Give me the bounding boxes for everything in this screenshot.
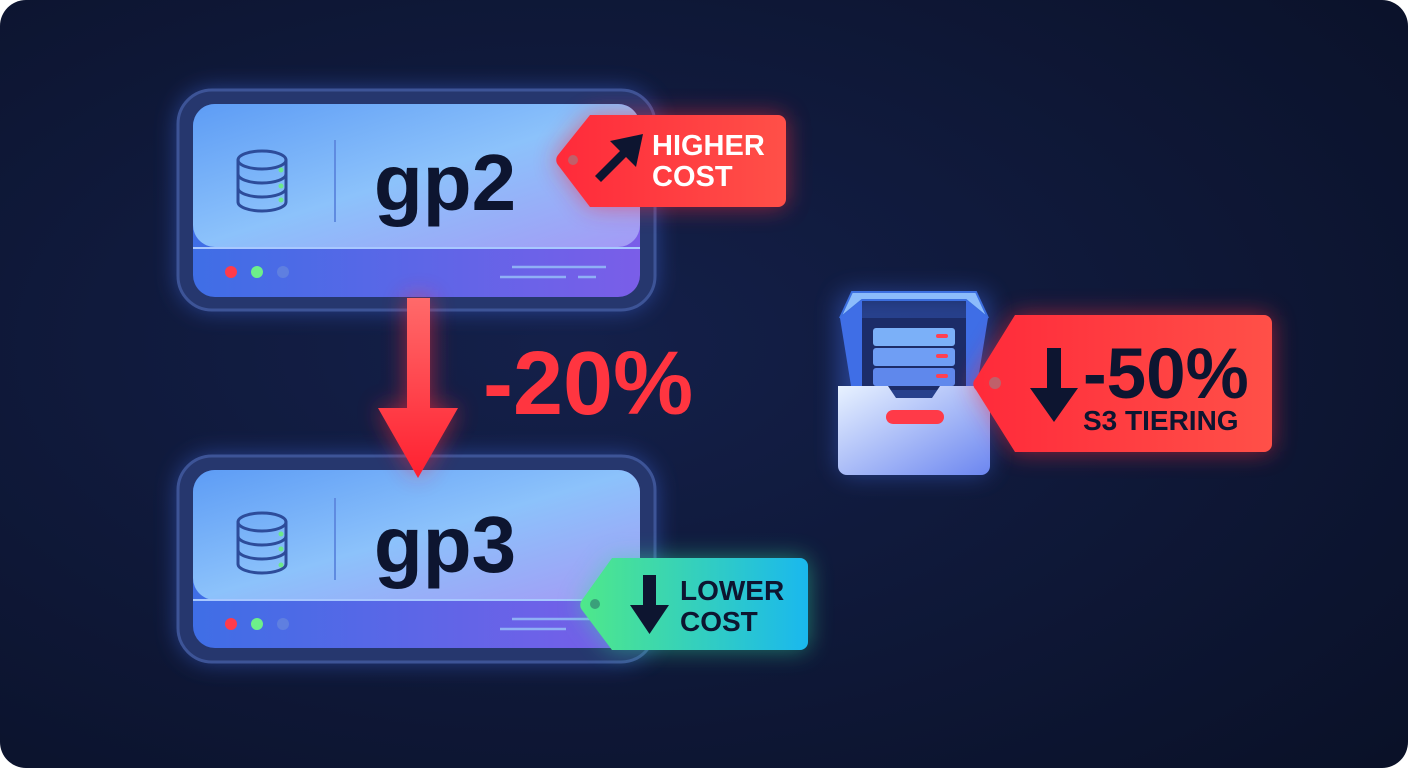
- icon: arrow down: [1030, 348, 1078, 422]
- icon: arrow up-right: [595, 134, 643, 182]
- icon: database: [238, 151, 286, 211]
- tag: higher cost: [556, 115, 786, 207]
- tag: lower cost: [580, 558, 808, 650]
- tag: lower cost: COST: [680, 606, 758, 637]
- label: -20%: -20%: [483, 334, 693, 434]
- tag: -50% S3 tiering: [973, 315, 1272, 452]
- tag: higher cost: HIGHER: [652, 130, 765, 162]
- tag: lower cost: LOWER: [680, 575, 784, 606]
- heading: gp2: gp2: [374, 138, 516, 227]
- icon: database: [238, 513, 286, 573]
- tag: -50% S3 tiering: S3 TIERING: [1083, 405, 1239, 436]
- panel: gp2: [178, 90, 655, 310]
- heading: gp3: gp3: [374, 500, 516, 589]
- panel: gp3: [178, 456, 655, 662]
- icon: arrow down: [630, 575, 669, 634]
- tag: higher cost: COST: [652, 161, 733, 193]
- tag: -50% S3 tiering: -50%: [1083, 335, 1249, 414]
- arrow: gp2 to gp3: [378, 298, 458, 478]
- icon: archive box: [838, 292, 990, 475]
